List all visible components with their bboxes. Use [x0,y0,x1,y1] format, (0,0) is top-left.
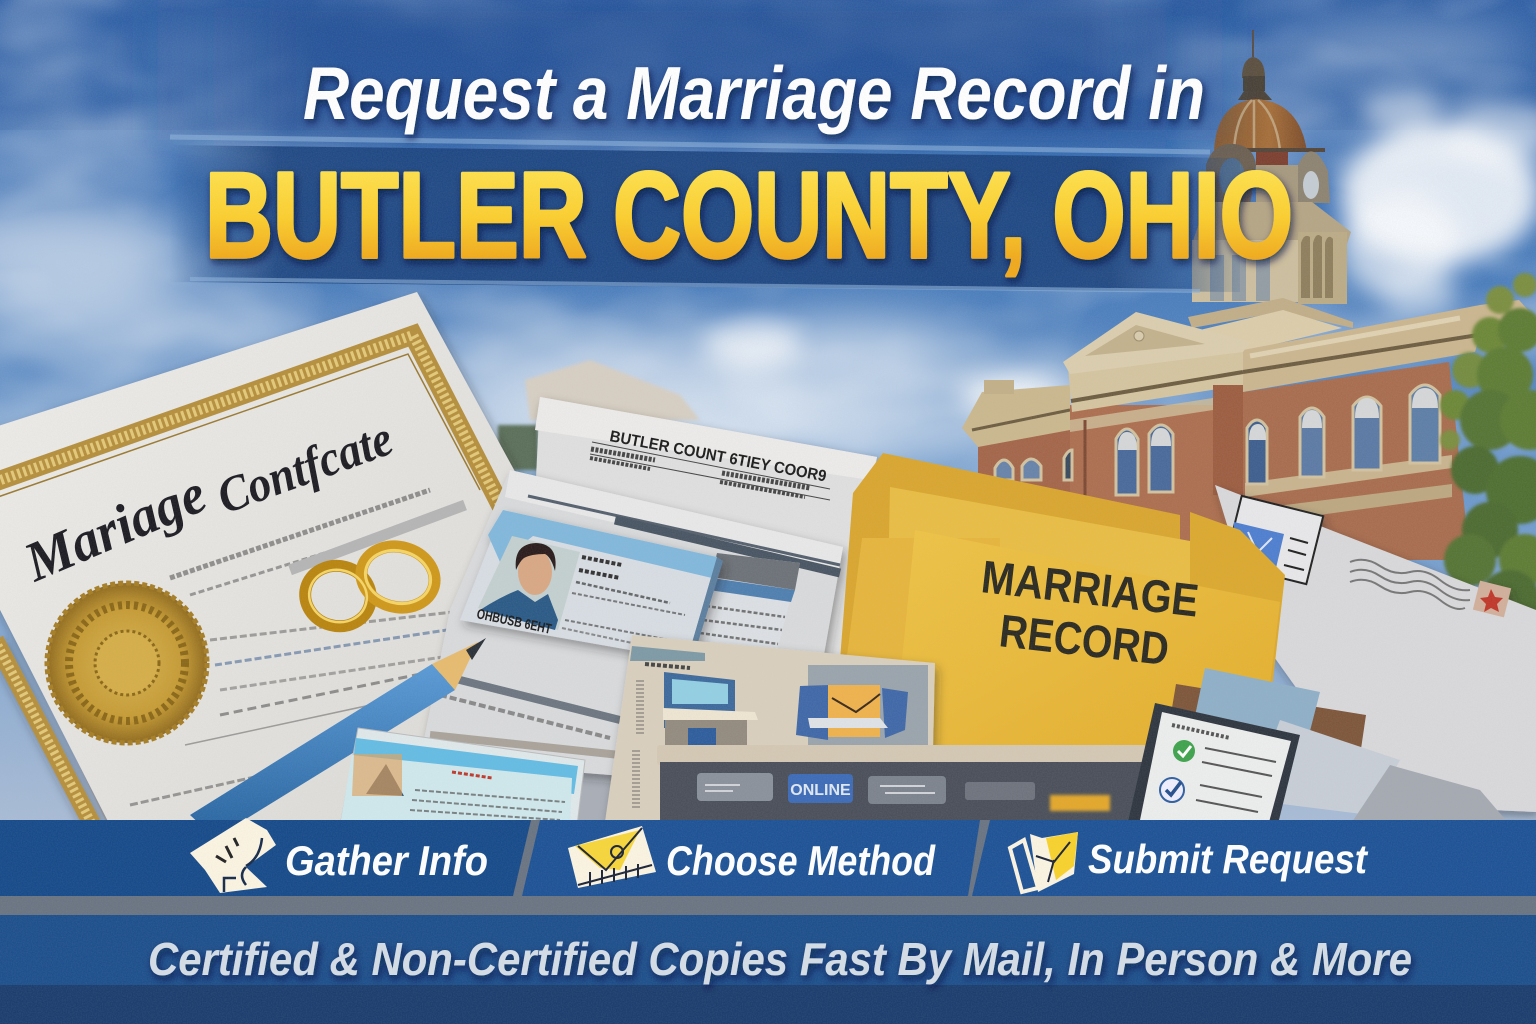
folder label: RECORD [997,604,1172,675]
label: choose method: Choose Method [666,837,936,884]
panel: lower paper bed [0,600,1000,830]
icon: gather info [190,818,276,893]
courthouse windows [995,385,1440,495]
title band [130,0,1250,292]
footer tagline: Certified & Non-Certified Copies Fast By Mail, In Person & More [148,933,1412,985]
folder label: MARRIAGE [979,550,1201,627]
certificate script heading: Mariage [15,463,215,594]
certificate script heading: Contfcate [210,409,400,524]
courthouse central pavilion [1063,312,1250,555]
desk and laptop [663,672,758,755]
icon: wedding rings [298,538,442,634]
label: submit request: Submit Request [1088,836,1369,882]
icon: envelope [568,826,656,888]
icon: submit folder [1010,832,1078,892]
front folder [893,530,1280,750]
panel: butler county paper [530,397,877,660]
panel: back form [695,553,800,650]
back folder [833,453,1180,750]
panel: folders [833,453,1285,750]
courthouse [962,30,1536,630]
courthouse left wing [962,380,1072,560]
tree [1440,273,1536,630]
green check [1173,740,1195,762]
label: gather info: Gather Info [285,837,488,884]
postage stamp [1225,496,1323,585]
red stamp star [1473,581,1511,617]
distant hill and trees [498,360,700,470]
online button: ONLINE [790,782,851,799]
blue check [1160,778,1184,802]
side folder [835,538,1000,750]
panel: marriage certificate [0,292,525,835]
online button [788,774,853,803]
panel: website screen [605,635,935,822]
banner: Choose Method [522,820,980,896]
lower strip [0,820,1536,920]
icon: pencil [190,638,486,838]
panel: id card [460,510,723,662]
certificate gold border [0,335,503,824]
footer band [0,915,1536,1024]
icon: gold seal [47,583,207,743]
folder label [979,550,1201,675]
id portrait [478,536,580,630]
title: Request a Marriage Record in: Request a Marriage Record in [303,51,1205,135]
courthouse tower [1188,30,1353,352]
clouds [0,0,1536,520]
banner: Submit Request [972,820,1536,896]
panel: wallet and papers [1160,668,1510,825]
panel: second paper [420,470,843,790]
postmark waves [1350,560,1470,609]
courthouse right wing [1243,300,1535,560]
panel: brochure [340,728,585,826]
panel: counter with buttons [657,745,1147,824]
panel: envelope [1215,485,1536,812]
certificate script heading [15,409,400,594]
mail icon on screen [796,665,928,745]
county paper heading: BUTLER COUNT 6TIEY COOR9 [608,428,828,485]
icon: checklist clipboard [1128,703,1300,832]
certificate body lines [130,490,490,805]
banner: Gather Info [0,818,531,896]
id card name: OHBUSB 6EHT [475,605,553,637]
